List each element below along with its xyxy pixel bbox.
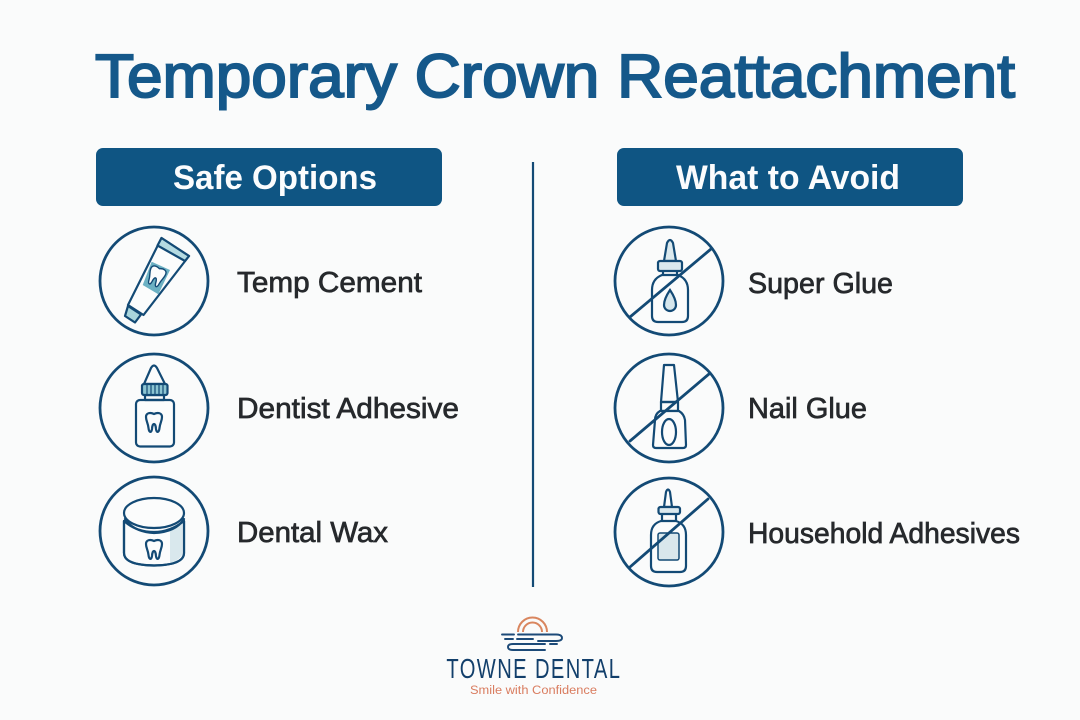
icon: cement tube [100, 227, 208, 335]
label: dental wax: Dental Wax [237, 517, 389, 549]
panel: safe options [96, 148, 459, 585]
label: nail glue: Nail Glue [748, 393, 867, 425]
icon: super glue crossed out [615, 227, 723, 335]
heading: safe options [96, 148, 442, 206]
label: super glue: Super Glue [748, 268, 893, 300]
center divider [532, 162, 534, 587]
label: household adhesives: Household Adhesives [748, 518, 1020, 550]
icon: nail glue crossed out [615, 354, 723, 462]
label: temp cement: Temp Cement [237, 267, 422, 299]
heading: what to avoid [617, 148, 963, 206]
icon: sun and waves [502, 618, 562, 650]
label: dentist adhesive: Dentist Adhesive [237, 393, 459, 425]
icon: household adhesive crossed out [615, 478, 723, 586]
panel: what to avoid [615, 148, 1020, 586]
tagline: Smile with Confidence [470, 685, 597, 697]
logo: towne dental [446, 618, 620, 697]
brand name: TOWNE DENTAL [446, 654, 620, 685]
heading: what to avoid: What to Avoid [676, 159, 900, 197]
icon: wax jar [100, 477, 208, 585]
heading: safe options: Safe Options [173, 159, 377, 197]
icon: adhesive bottle [100, 354, 208, 462]
title: Temporary Crown Reattachment [95, 42, 1015, 110]
